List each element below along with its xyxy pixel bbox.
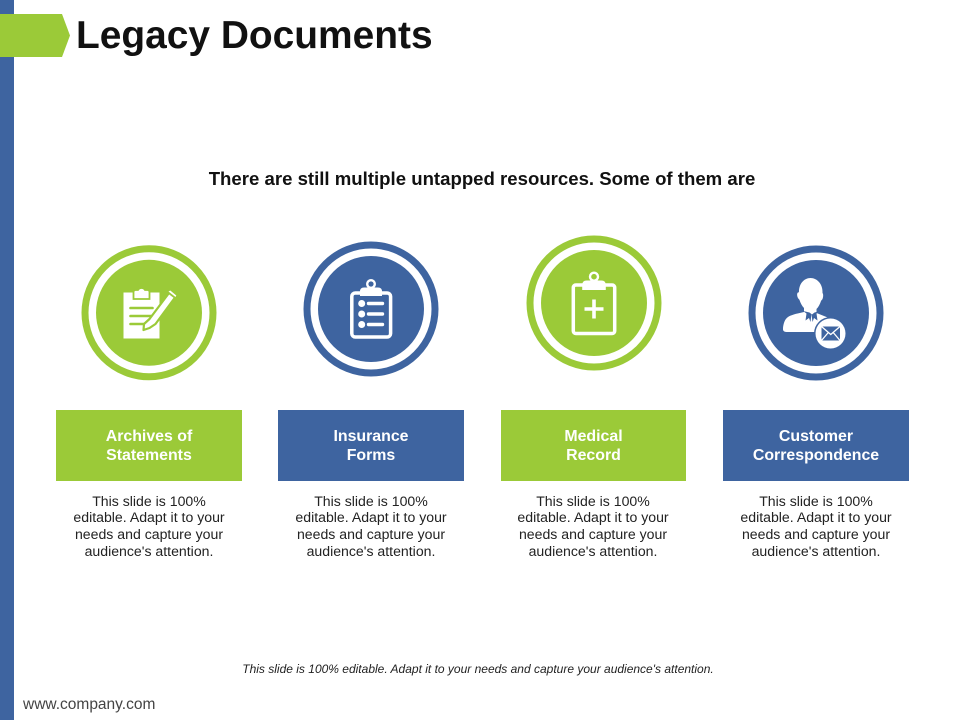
text: customer: audience's attention. xyxy=(752,543,880,559)
text: archives: This slide is 100% xyxy=(92,492,206,508)
label box: customer: Correspondence xyxy=(753,446,879,464)
icon: medical clipboard with plus xyxy=(526,236,662,370)
icon: insurance checklist clipboard xyxy=(304,242,438,376)
label box: archives: Archives of xyxy=(106,428,192,444)
text: insurance: audience's attention. xyxy=(307,543,435,559)
text: customer xyxy=(740,492,892,559)
text: archives xyxy=(73,492,225,559)
website: www.company.com xyxy=(23,696,155,713)
label box: medical xyxy=(501,410,686,481)
text: customer: This slide is 100% xyxy=(759,492,873,508)
label box: archives: Statements xyxy=(106,446,192,464)
text: medical: needs and capture your xyxy=(519,526,667,542)
label box: insurance: Forms xyxy=(347,446,395,464)
footer note: This slide is 100% editable. Adapt it to your needs and capture your audience's attention. xyxy=(242,662,714,676)
text: insurance xyxy=(295,492,447,559)
left sidebar xyxy=(0,0,14,720)
label box: medical: Medical xyxy=(564,428,623,444)
label box: medical: Record xyxy=(566,446,621,464)
label box: archives xyxy=(56,410,242,481)
text: customer: editable. Adapt it to your xyxy=(740,509,892,525)
label box: insurance: Insurance xyxy=(333,428,409,444)
icon: archives clipboard with pencil xyxy=(82,245,216,380)
text: archives: needs and capture your xyxy=(75,526,223,542)
icon: person with envelope xyxy=(748,246,884,380)
text: medical: audience's attention. xyxy=(529,543,657,559)
text: medical: editable. Adapt it to your xyxy=(517,509,669,525)
text: insurance: This slide is 100% xyxy=(314,492,428,508)
text: medical xyxy=(517,492,669,559)
text: medical: This slide is 100% xyxy=(536,492,650,508)
title arrow tab xyxy=(0,14,70,57)
label box: insurance xyxy=(278,410,464,481)
text: archives: editable. Adapt it to your xyxy=(73,509,225,525)
subtitle: There are still multiple untapped resources. Some of them are xyxy=(209,168,755,189)
text: customer: needs and capture your xyxy=(742,526,890,542)
title: Legacy Documents xyxy=(76,14,433,57)
text: insurance: needs and capture your xyxy=(297,526,445,542)
text: insurance: editable. Adapt it to your xyxy=(295,509,447,525)
label box: customer: Customer xyxy=(779,428,853,444)
label box: customer xyxy=(723,410,909,481)
text: archives: audience's attention. xyxy=(85,543,213,559)
